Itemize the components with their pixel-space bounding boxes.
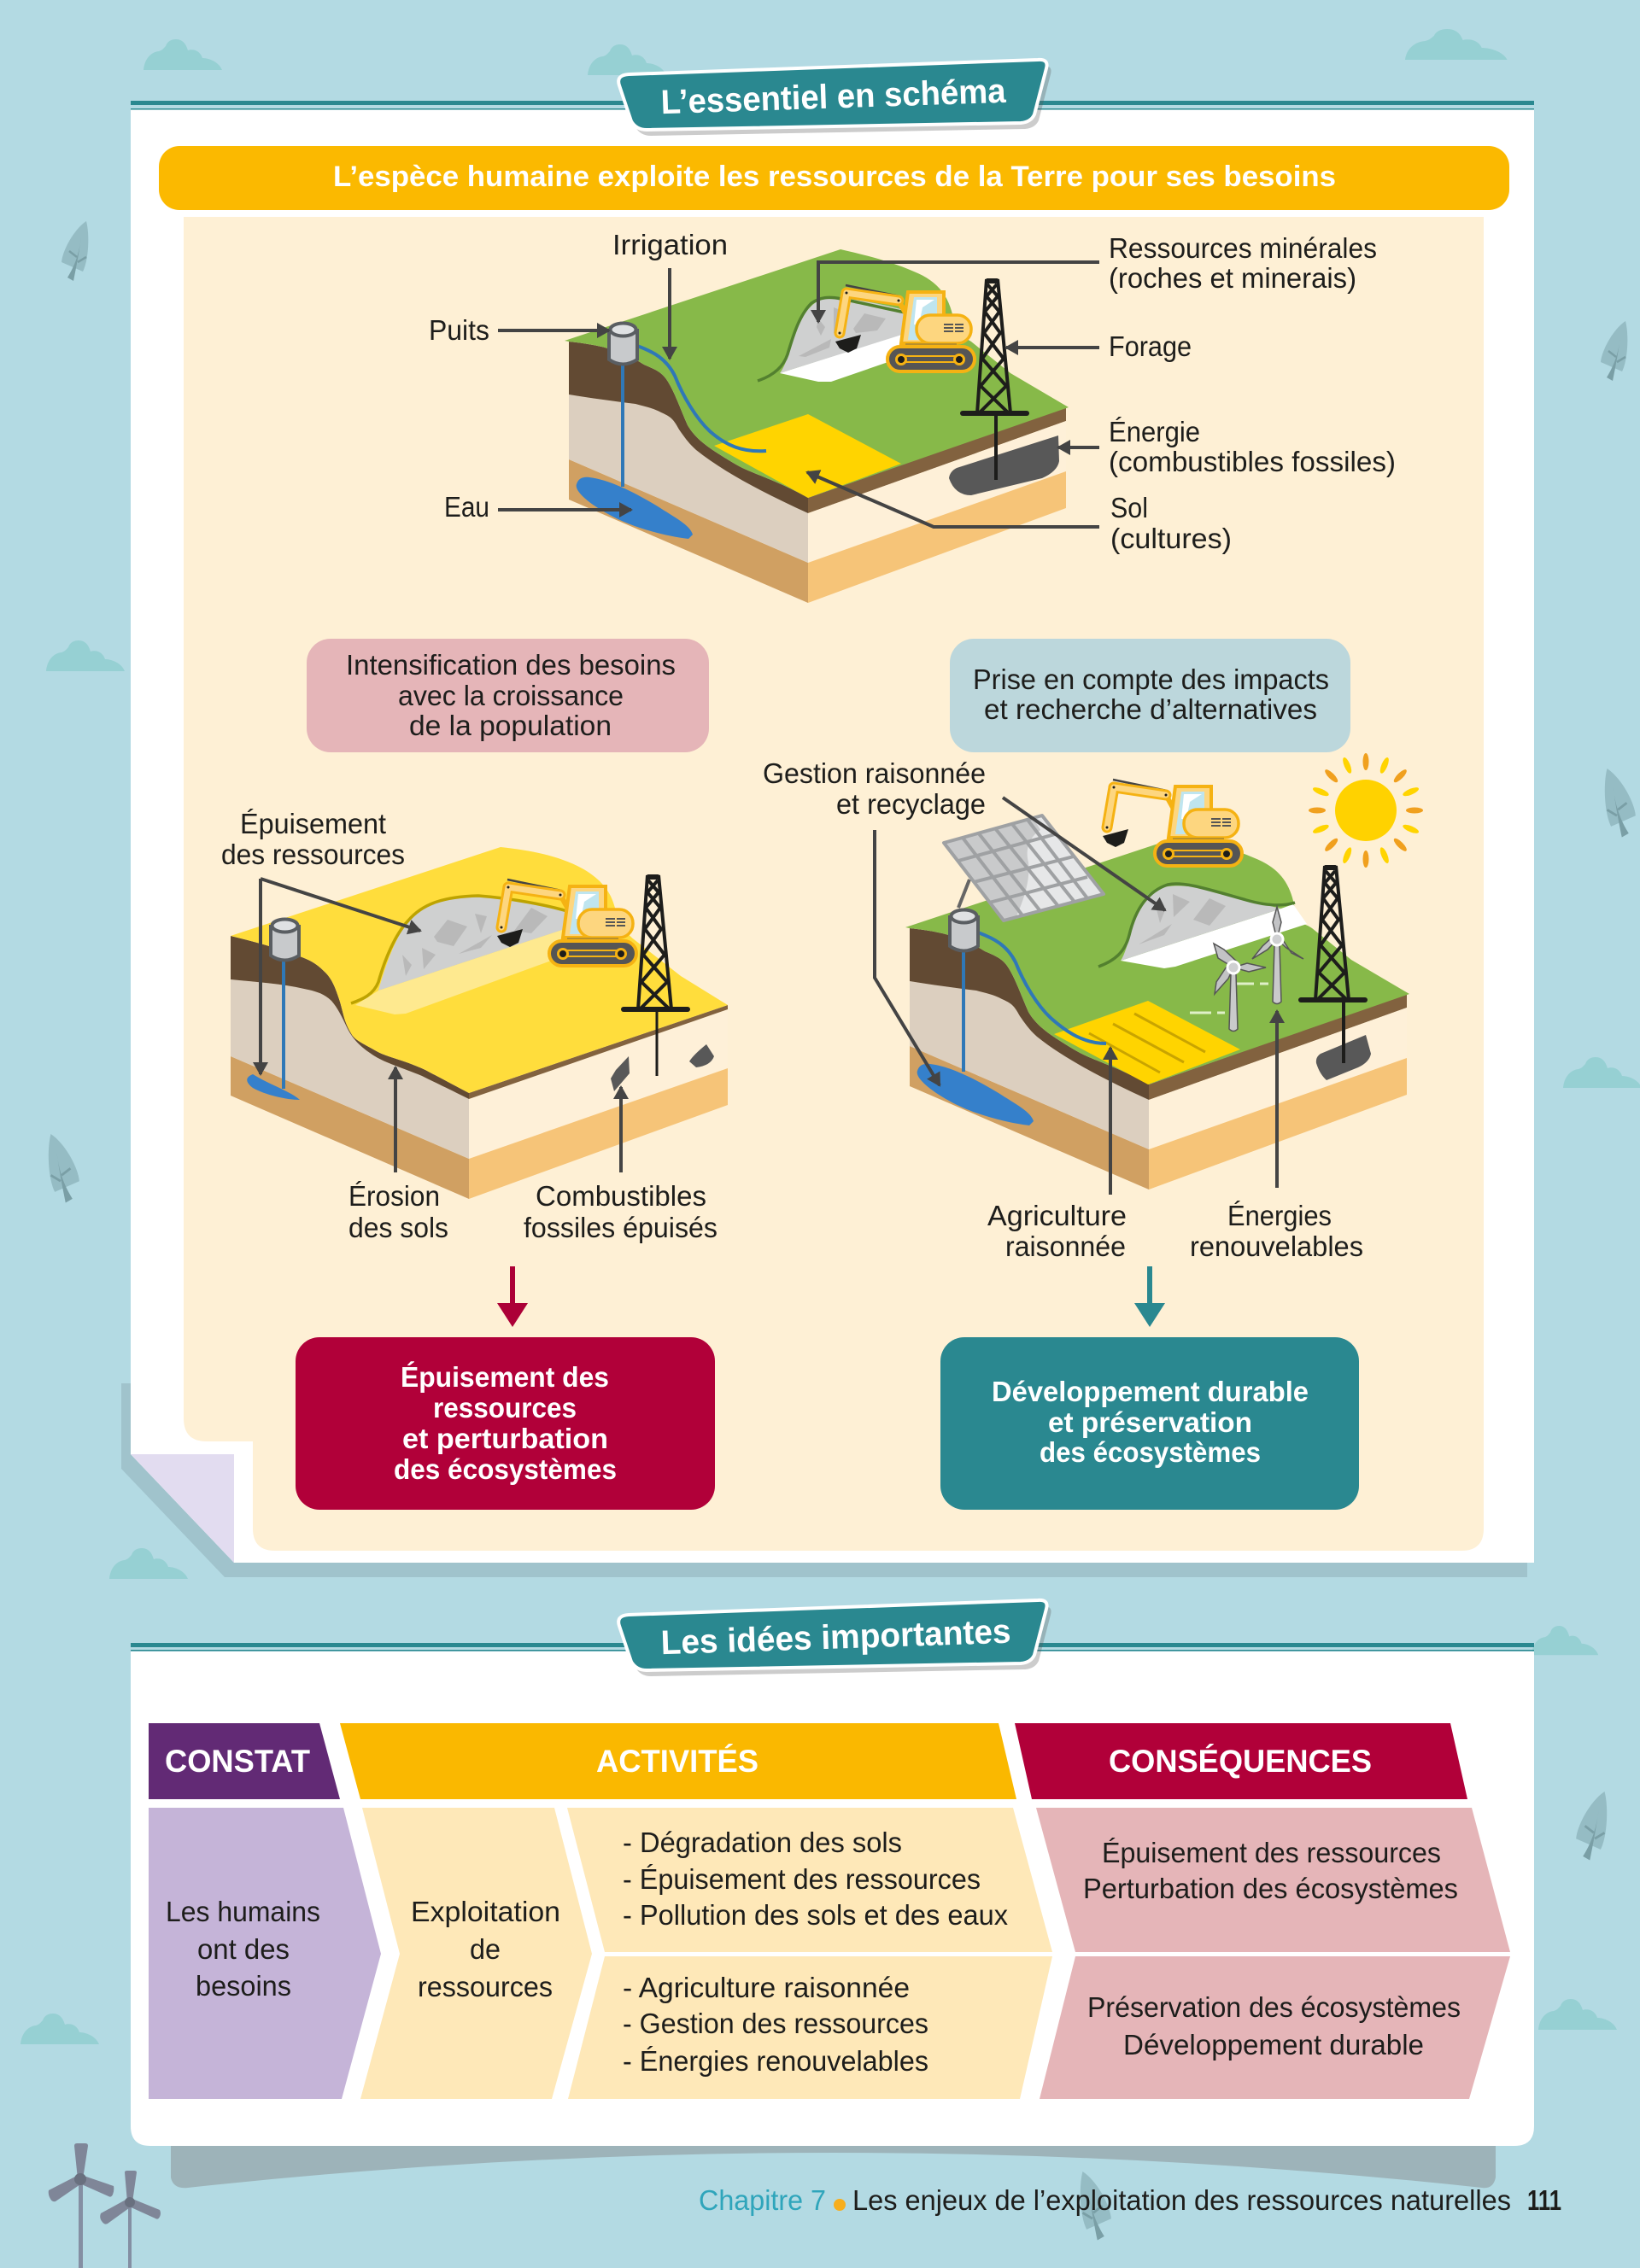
panel: shadow [121,1383,1527,1577]
recycled hill [1098,884,1307,968]
page fold [131,1454,234,1563]
panel: white sheet [131,108,1534,1563]
well [271,919,299,1089]
derrick [1301,865,1365,1063]
cell: conséquences positives [1040,1956,1510,2099]
mined hill [351,896,567,1014]
cell: activités négatives [567,1808,1052,1952]
panel: cream background [184,217,1484,1551]
table header: conséquences: CONSÉQUENCES [1109,1744,1372,1779]
label: Ressources minérales: Ressources minérales [1109,232,1377,264]
label: Combustibles fossiles épuisés: Combustibles [536,1180,706,1212]
outcome box: sustainable development: et préservation [1048,1406,1252,1438]
diagram: sustainable block [905,753,1423,1190]
cell: conséquences positives: Développement durable [1123,2029,1424,2060]
title tab: L’essentiel en schéma [660,73,1007,121]
label: Énergie: Énergie [1109,416,1200,447]
cell: activités raisonnées: - Agriculture raisonnée [623,1972,910,2003]
diagram: depleted block [231,847,728,1199]
label: Épuisement des ressources [221,808,420,1074]
callout: impacts: et recherche d’alternatives [984,693,1317,725]
title tab 2: Les idées importantes [660,1613,1011,1662]
label: Agriculture raisonnée: Agriculture [987,1200,1127,1231]
well [950,910,978,1072]
cell: les humains ont des besoins [149,1808,381,2099]
cell: conséquences négatives: Épuisement des ressources [1102,1837,1441,1868]
sun [1309,753,1423,868]
panel 2: white card [131,1651,1534,2146]
derrick [624,874,688,1076]
drilling derrick [963,278,1027,480]
table header: conséquences [1015,1723,1467,1799]
excavator [497,880,636,966]
callout: intensification [307,639,709,752]
depleted fuel [611,1044,714,1091]
cultivated field [714,414,901,498]
label: Énergies renouvelables: renouvelables [1190,1230,1363,1262]
label: Gestion raisonnée et recyclage [763,757,1165,1085]
depleted water [247,1074,300,1100]
arrow: to depletion [497,1266,528,1327]
diagram: initial block [565,249,1069,603]
excavator [1103,780,1242,866]
field with furrows [1054,1001,1240,1084]
cell: activités négatives: - Dégradation des sols [623,1827,902,1858]
cell: conséquences négatives: Perturbation des écosystèmes [1083,1873,1458,1904]
title tab 2 [618,1600,1051,1676]
cell: conséquences positives: Préservation des écosystèmes [1087,1991,1461,2023]
solar panel [944,815,1104,921]
label: Eau: Eau [444,491,489,523]
label: Sol: Sol [1110,492,1148,523]
callout: impacts: Prise en compte des impacts [973,663,1329,695]
cell: exploitation de ressources: de [470,1933,501,1965]
label: Ressources minérales [818,232,1377,322]
water reservoir [917,1064,1034,1125]
label: Gestion raisonnée et recyclage: Gestion raisonnée [763,757,986,789]
banner heading [159,146,1509,210]
cell: activités raisonnées: - Gestion des ressources [623,2008,928,2039]
table header: activités: ACTIVITÉS [596,1744,758,1779]
header rule 2 [131,1643,1534,1651]
fossil fuel pocket [949,435,1059,495]
outcome box: sustainable development: Développement durable [992,1376,1309,1407]
title tab [618,60,1051,136]
label: Énergie: (combustibles fossiles) [1109,446,1396,477]
label: Sol [807,472,1232,554]
cell: conséquences négatives [1036,1808,1510,1952]
label: Érosion des sols: des sols [348,1212,448,1243]
label: Forage: Forage [1109,330,1192,362]
well [609,323,637,487]
wind turbines [1190,907,1303,1032]
excavator [835,285,975,371]
banner heading: L’espèce humaine exploite les ressources de la Terre pour ses besoins [333,161,1336,193]
cell: les humains ont des besoins: besoins [196,1970,291,2002]
label: Irrigation: Irrigation [612,229,728,260]
footer: 111 [1527,2184,1561,2216]
table header: constat: CONSTAT [165,1744,310,1779]
outcome box: depletion: Épuisement des [401,1361,609,1393]
cell: activités raisonnées: - Énergies renouvelables [623,2045,928,2077]
label: Érosion des sols [348,1067,448,1243]
water reservoir [577,477,693,539]
label: Épuisement des ressources: des ressources [221,839,405,870]
label: Gestion raisonnée et recyclage: et recyclage [836,788,986,820]
irrigation pipe [637,346,766,451]
irrigation pipe [978,932,1106,1043]
cell: activités négatives: - Épuisement des ressources [623,1863,981,1895]
label: Énergies renouvelables: Énergies [1227,1200,1332,1231]
header rule [131,101,1534,109]
panel 2: bottom shadow [171,2143,1496,2188]
cell: activités raisonnées [568,1956,1052,2099]
table header: activités [340,1723,1016,1799]
outcome box: depletion: ressources [433,1392,577,1423]
cell: les humains ont des besoins: ont des [197,1933,290,1965]
cell: exploitation de ressources: Exploitation [411,1896,560,1927]
label: Épuisement des ressources: Épuisement [240,808,386,839]
outcome box: depletion: et perturbation [402,1423,608,1454]
cell: exploitation de ressources: ressources [418,1971,553,2002]
mined hill [758,297,907,382]
label: Ressources minérales: (roches et minerais) [1109,262,1356,294]
footer: Chapitre 7 [699,2184,826,2216]
outcome box: sustainable development: des écosystèmes [1040,1436,1261,1468]
decor: wind turbines bottom-left [49,2143,161,2268]
label: Agriculture raisonnée [987,1048,1127,1262]
label: Combustibles fossiles épuisés [524,1087,718,1243]
label: Puits: Puits [429,314,489,346]
label: Énergies renouvelables [1190,1011,1363,1262]
outcome box: depletion [296,1337,715,1510]
callout: impacts [950,639,1350,752]
callout: intensification: avec la croissance [398,680,624,711]
label: Érosion des sols: Érosion [348,1180,440,1212]
cell: les humains ont des besoins: Les humains [166,1896,320,1927]
label: Énergie [1058,416,1396,477]
fossil fuel pocket [1316,1035,1371,1080]
label: Agriculture raisonnée: raisonnée [1005,1230,1126,1262]
callout: intensification: Intensification des besoins [346,649,676,681]
outcome box: sustainable development [940,1337,1359,1510]
cell: exploitation de ressources [360,1808,592,2099]
arrow: to sustainable development [1134,1266,1165,1327]
cell: activités négatives: - Pollution des sols et des eaux [623,1899,1008,1931]
outcome box: depletion: des écosystèmes [394,1453,617,1485]
callout: intensification: de la population [409,710,612,741]
label: Sol: (cultures) [1110,523,1232,554]
label: Combustibles fossiles épuisés: fossiles épuisés [524,1212,718,1243]
footer: Les enjeux de l’exploitation des ressources naturelles [852,2184,1511,2216]
table header: constat [149,1723,340,1799]
